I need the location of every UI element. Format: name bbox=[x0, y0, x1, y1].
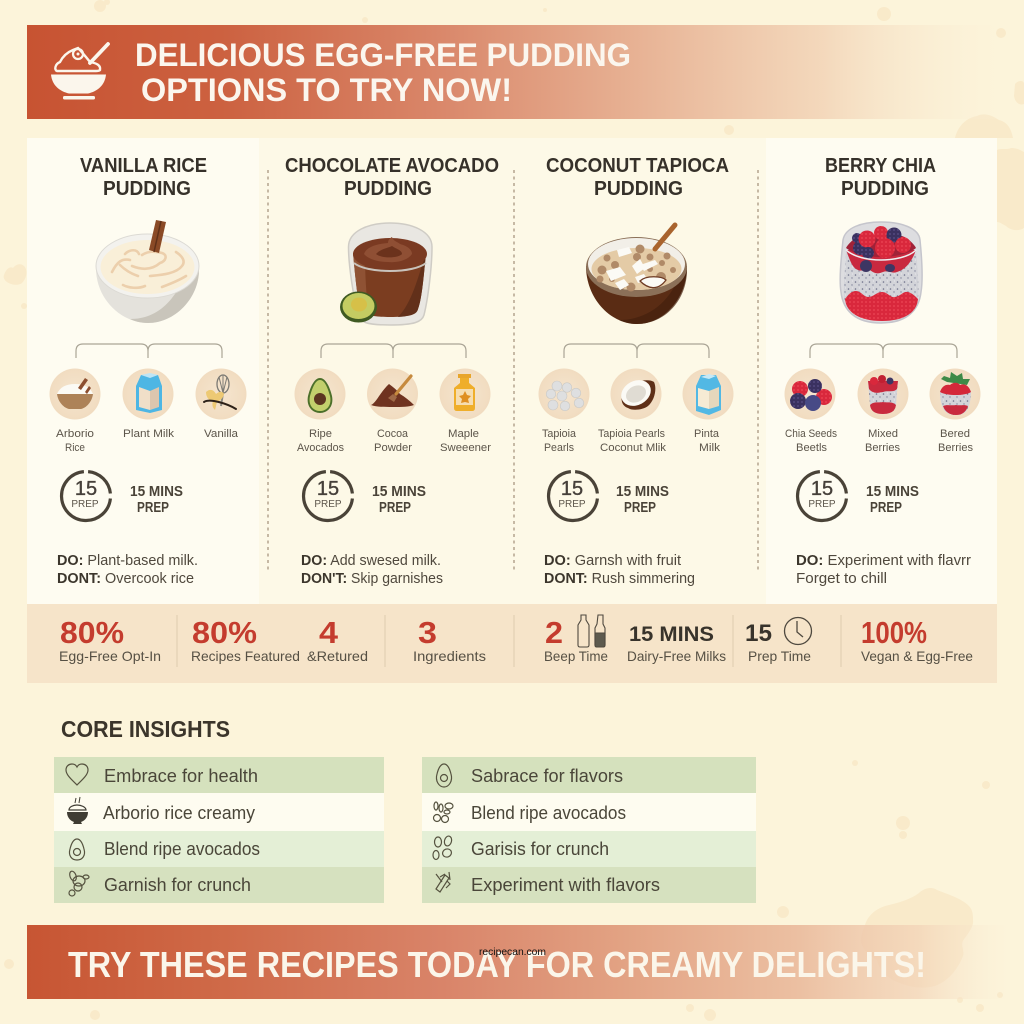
stat: recipes featured: Recipes Featured bbox=[191, 648, 300, 664]
label: maple sweetener: Sweeener bbox=[440, 442, 491, 454]
call to action: TRY THESE RECIPES TODAY FOR CREAMY DELIGHTS! bbox=[68, 944, 926, 985]
label: mixed berries: Mixed bbox=[868, 428, 898, 440]
label: arborio rice bbox=[56, 428, 94, 454]
prep timer: PREP bbox=[558, 499, 586, 510]
prep timer: PREP bbox=[71, 499, 99, 510]
icon: ripe avocado bbox=[294, 368, 346, 420]
icon: nuts bbox=[433, 835, 453, 860]
label: tapioca pearls coconut milk bbox=[598, 428, 667, 454]
label: pinta milk: Milk bbox=[699, 442, 721, 454]
prep time text bbox=[130, 484, 183, 516]
stat: dairy-free milks: 15 MINS bbox=[629, 623, 714, 646]
stat: ingredients: Ingredients bbox=[413, 648, 486, 664]
heading: vanilla rice: VANILLA RICE bbox=[80, 155, 207, 177]
icon: pudding bowl bbox=[51, 44, 108, 100]
heading: coconut tapioca: COCONUT TAPIOCA bbox=[546, 155, 729, 177]
icon: maple sweetener bbox=[440, 368, 490, 420]
heading: chocolate avocado: PUDDING bbox=[344, 178, 432, 200]
heading: core insights: CORE INSIGHTS bbox=[61, 716, 230, 742]
panel: coconut tapioca pudding bbox=[538, 155, 734, 587]
insight: health: Embrace for health bbox=[104, 765, 258, 786]
label: chia seeds beetls bbox=[785, 428, 837, 454]
prep timer: 15 bbox=[811, 478, 833, 500]
label: chia seeds beetls: Beetls bbox=[796, 442, 828, 454]
do and don't: DONT: Overcook rice bbox=[57, 571, 194, 587]
icon: seeds bbox=[434, 802, 453, 822]
label: bered berries: Bered bbox=[940, 428, 970, 440]
icon: heart bbox=[66, 764, 88, 785]
heading: coconut tapioca bbox=[546, 155, 729, 200]
header banner bbox=[27, 25, 997, 119]
icon: clock bbox=[784, 618, 812, 644]
heading: chocolate avocado: CHOCOLATE AVOCADO bbox=[285, 155, 499, 177]
do and don't bbox=[57, 553, 198, 587]
icon: arborio rice bbox=[50, 368, 100, 420]
stats band bbox=[27, 604, 997, 683]
heading: berry chia: BERRY CHIA bbox=[825, 155, 936, 177]
label: tapioca pearls coconut milk: Tapioia Pearls bbox=[598, 428, 665, 440]
label: bered berries bbox=[938, 428, 974, 454]
ingredient connector bbox=[321, 344, 466, 358]
do and don't bbox=[544, 553, 695, 587]
stat: returned: &Retured bbox=[307, 648, 368, 664]
label: plant milk: Plant Milk bbox=[123, 428, 175, 440]
insight: flavors: Sabrace for flavors bbox=[471, 765, 623, 786]
stat: beep time bbox=[544, 615, 608, 664]
do and don't: DON'T: Skip garnishes bbox=[301, 571, 443, 587]
label: arborio rice: Rice bbox=[65, 442, 85, 454]
heading: berry chia: PUDDING bbox=[841, 178, 929, 200]
stat: ingredients: 3 bbox=[418, 615, 437, 650]
label: tapioca pearls: Pearls bbox=[544, 442, 574, 454]
do and don't: DO: Add swesed milk. bbox=[301, 553, 441, 569]
label: pinta milk: Pinta bbox=[694, 428, 720, 440]
panel: berry chia pudding bbox=[784, 155, 980, 587]
prep time text: PREP bbox=[870, 500, 902, 516]
do and don't: DO: Plant-based milk. bbox=[57, 553, 198, 569]
label: mixed berries bbox=[865, 428, 901, 454]
do and don't bbox=[796, 553, 971, 587]
label: mixed berries: Berries bbox=[865, 442, 901, 454]
illustration: chocolate pudding glass bbox=[340, 223, 432, 325]
stat: recipes featured: 80% bbox=[192, 615, 257, 650]
insight: garisis: Garisis for crunch bbox=[471, 838, 609, 859]
label: maple sweetener bbox=[440, 428, 491, 454]
stat: dairy-free milks: Dairy-Free Milks bbox=[627, 648, 726, 664]
prep time text: PREP bbox=[379, 500, 411, 516]
icon: tapioca pearls bbox=[538, 368, 590, 420]
illustration: rice pudding bowl bbox=[96, 220, 199, 323]
icon: garnish bbox=[68, 870, 89, 896]
prep timer: PREP bbox=[808, 499, 836, 510]
ingredient connector bbox=[810, 344, 957, 358]
panel: recipes background bbox=[27, 138, 997, 604]
insight: experiment: Experiment with flavors bbox=[471, 874, 660, 895]
stat: vegan and egg-free bbox=[861, 615, 973, 664]
insight: blend avocados: Blend ripe avocados bbox=[471, 802, 626, 823]
title: DELICIOUS EGG-FREE PUDDING bbox=[135, 37, 631, 73]
label: cocoa powder: Powder bbox=[374, 442, 412, 454]
stat: prep time: Prep Time bbox=[748, 648, 811, 664]
label: pinta milk bbox=[694, 428, 721, 454]
illustration: berry chia glass bbox=[840, 222, 922, 323]
stat: beep time: Beep Time bbox=[544, 648, 608, 664]
icon: rice bowl bbox=[67, 797, 88, 824]
prep time text: PREP bbox=[137, 500, 169, 516]
illustration: coconut tapioca bowl bbox=[586, 225, 687, 324]
insight: avocados: Blend ripe avocados bbox=[104, 838, 260, 859]
label: cocoa powder: Cocoa bbox=[377, 428, 409, 440]
label: tapioca pearls bbox=[542, 428, 577, 454]
prep timer bbox=[62, 472, 110, 521]
label: arborio rice: Arborio bbox=[56, 428, 94, 440]
prep timer: 15 bbox=[75, 478, 97, 500]
icon: avocado bbox=[436, 764, 452, 787]
stat: egg-free opt-in: 80% bbox=[60, 615, 124, 650]
icon: plain milk bbox=[682, 368, 734, 420]
stat: returned: 4 bbox=[319, 615, 339, 650]
prep time text bbox=[866, 484, 919, 516]
do and don't: DO: Experiment with flavrr bbox=[796, 553, 971, 569]
stat: prep time bbox=[745, 620, 811, 664]
ingredient connector bbox=[76, 344, 222, 358]
label: cocoa powder bbox=[374, 428, 412, 454]
stat: vegan and egg-free: Vegan & Egg-Free bbox=[861, 648, 973, 664]
icon: plant milk bbox=[122, 368, 174, 420]
footer banner bbox=[27, 925, 1017, 999]
icon: mixed berries parfait bbox=[858, 368, 908, 420]
prep time text bbox=[616, 484, 669, 516]
label: ripe avocados: Avocados bbox=[297, 442, 344, 454]
insights: right column bbox=[422, 757, 756, 903]
prep timer bbox=[304, 472, 352, 521]
heading: vanilla rice: PUDDING bbox=[103, 178, 191, 200]
icon: bottles bbox=[578, 615, 605, 647]
insights: left column bbox=[54, 757, 384, 903]
icon: coconut bbox=[610, 368, 662, 420]
icon: herbs bbox=[436, 872, 450, 892]
panel: chocolate avocado pudding bbox=[285, 155, 499, 587]
prep timer: 15 bbox=[561, 478, 583, 500]
prep timer: PREP bbox=[314, 499, 342, 510]
prep time text: PREP bbox=[624, 500, 656, 516]
ingredient connector bbox=[564, 344, 709, 358]
icon: avocado bbox=[69, 839, 85, 860]
prep time text bbox=[372, 484, 426, 516]
heading: berry chia bbox=[825, 155, 936, 200]
icon: vanilla and whisk bbox=[196, 368, 246, 420]
label: tapioca pearls coconut milk: Coconut Mlik bbox=[600, 442, 667, 454]
stat: ingredients bbox=[413, 615, 486, 664]
prep time text: 15 MINS bbox=[372, 484, 426, 500]
stat: vegan and egg-free: 100% bbox=[861, 615, 927, 650]
label: bered berries: Berries bbox=[938, 442, 974, 454]
do and don't bbox=[301, 553, 443, 587]
prep timer: 15 bbox=[317, 478, 339, 500]
title: OPTIONS TO TRY NOW! bbox=[141, 72, 512, 108]
prep time text: 15 MINS bbox=[866, 484, 919, 500]
heading: coconut tapioca: PUDDING bbox=[594, 178, 683, 200]
stat: dairy-free milks bbox=[627, 623, 726, 664]
label: tapioca pearls: Tapioia bbox=[542, 428, 577, 440]
label: maple sweetener: Maple bbox=[448, 428, 479, 440]
stat: egg-free opt-in: Egg-Free Opt-In bbox=[59, 648, 161, 664]
label: ripe avocados bbox=[297, 428, 344, 454]
do and don't: DONT: Rush simmering bbox=[544, 571, 695, 587]
heading: chocolate avocado bbox=[285, 155, 499, 200]
prep time text: 15 MINS bbox=[130, 484, 183, 500]
icon: cocoa powder bbox=[367, 368, 418, 420]
title bbox=[135, 37, 631, 108]
prep time text: 15 MINS bbox=[616, 484, 669, 500]
stat: recipes featured bbox=[191, 615, 300, 664]
do and don't: DO: Garnsh with fruit bbox=[544, 553, 681, 569]
insight: crunch: Garnish for crunch bbox=[104, 874, 251, 895]
do and don't: Forget to chill bbox=[796, 571, 887, 587]
label: chia seeds beetls: Chia Seeds bbox=[785, 428, 837, 440]
prep timer bbox=[549, 472, 597, 521]
stat: egg-free opt-in bbox=[59, 615, 161, 664]
icon: chia seeds and berries bbox=[784, 368, 836, 420]
icon: berries parfait with mint bbox=[930, 368, 980, 420]
stat: returned bbox=[307, 615, 368, 664]
watermark: recipecan.com bbox=[479, 947, 546, 958]
label: vanilla: Vanilla bbox=[204, 428, 239, 440]
insight: rice: Arborio rice creamy bbox=[103, 802, 256, 823]
panel: vanilla rice pudding bbox=[50, 155, 246, 587]
stat: beep time: 2 bbox=[545, 615, 563, 650]
label: ripe avocados: Ripe bbox=[309, 428, 332, 440]
heading: vanilla rice bbox=[80, 155, 207, 200]
stat: prep time: 15 bbox=[745, 620, 772, 647]
prep timer bbox=[798, 472, 846, 521]
